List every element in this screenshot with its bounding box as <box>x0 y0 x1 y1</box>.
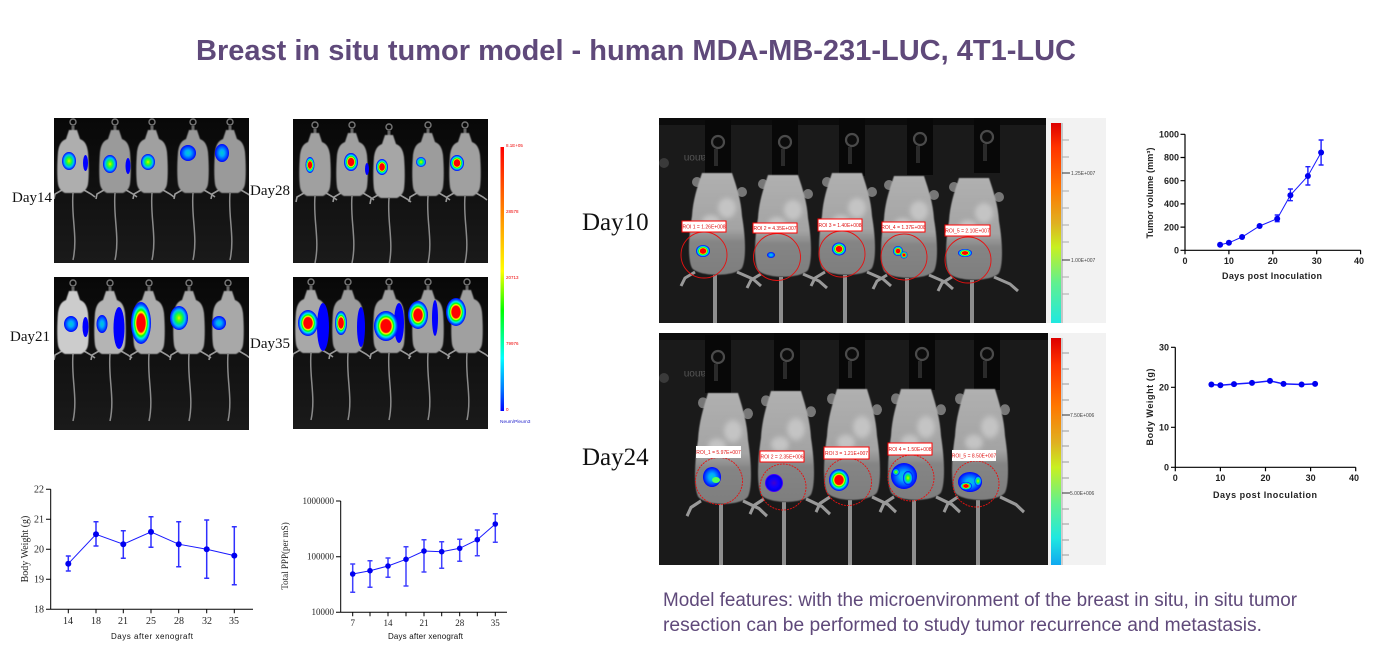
panel: Day24 image with ROI circles: Tanon <box>684 368 711 379</box>
color scale: Day10: 1.00E+007 <box>1071 258 1096 264</box>
panel: Day24 image with ROI circles: ROI_1 = 5.97E+007 <box>696 450 741 456</box>
chart: body weight, left: 21 <box>118 616 128 627</box>
chart: tumor volume: 10 <box>1224 256 1234 266</box>
text block: model features <box>663 590 1298 636</box>
chart: tumor volume: 800 <box>1164 153 1179 163</box>
chart: tumor volume: 0 <box>1174 246 1179 256</box>
panel: Day24 image with ROI circles: ROI 4 = 1.50E+008 <box>888 447 932 453</box>
chart: total photon flux, left: 7 <box>350 618 355 628</box>
chart: body weight, left: Body Weight (g) <box>20 516 31 582</box>
panel: Day10 image with ROI circles: ROI 3 = 1.40E+008 <box>818 223 862 229</box>
chart: body weight, left: 14 <box>63 616 73 627</box>
chart: body weight, right <box>1145 342 1359 500</box>
chart: tumor volume: Tumor volume (mm³) <box>1145 148 1155 238</box>
chart: tumor volume <box>1145 130 1364 281</box>
text block: model features: resection can be performed to study tumor recurrence and metastasis. <box>663 615 1262 636</box>
color scale bar for left images: 8.1E+05 <box>506 143 523 148</box>
chart: body weight, right: 40 <box>1349 473 1359 483</box>
chart: body weight, left: 25 <box>146 616 156 627</box>
title: Breast in situ tumor model - human MDA-MB-231-LUC, 4T1-LUC <box>196 35 1076 67</box>
color scale bar for left images: 0 <box>506 407 509 412</box>
panel: Day21 bioluminescence image <box>54 277 250 430</box>
chart: total photon flux, left: 21 <box>420 618 428 628</box>
label: Day14: Day14 <box>12 190 52 206</box>
panel: Day10 image with ROI circles: ROI_4 = 1.37E+008 <box>881 225 926 231</box>
chart: total photon flux, left: 28 <box>455 618 465 628</box>
chart: body weight, right: 10 <box>1215 473 1225 483</box>
chart: total photon flux, left: 10000 <box>312 607 334 617</box>
color scale: Day24: 5.00E+006 <box>1070 491 1095 497</box>
panel: Day24 image with ROI circles: ROI_5 = 8.50E+007 <box>952 454 996 460</box>
panel: Day10 image with ROI circles <box>659 118 1046 323</box>
chart: body weight, left: 18 <box>34 604 44 616</box>
chart: total photon flux, left: 100000 <box>307 552 334 562</box>
text block: model features: Model features: with the microenvironment of the breast in situ, in situ tumor <box>663 590 1298 611</box>
chart: body weight, left: 21 <box>34 514 44 526</box>
chart: body weight, left: 28 <box>174 616 184 627</box>
chart: body weight, left: 32 <box>202 616 212 627</box>
chart: tumor volume: 400 <box>1164 199 1179 209</box>
panel: Day35 bioluminescence image <box>292 277 489 429</box>
panel: Day10 image with ROI circles: ROI 1 = 1.26E+008 <box>682 224 726 230</box>
chart: total photon flux, left: 14 <box>384 618 393 628</box>
label: Day10: Day10 <box>582 209 649 236</box>
color scale bar for left images: 20713 <box>506 275 519 280</box>
chart: tumor volume: 20 <box>1268 256 1278 266</box>
chart: body weight, right: Days post Inoculation <box>1213 490 1317 500</box>
chart: body weight, left: 20 <box>34 544 44 556</box>
chart: body weight, right: 20 <box>1159 382 1169 392</box>
chart: body weight, left: 19 <box>34 574 44 586</box>
panel: Day24 image with ROI circles: ROI 2 = 2.35E+006 <box>760 454 804 460</box>
chart: tumor volume: 30 <box>1312 256 1322 266</box>
color scale: Day10 <box>1046 118 1106 323</box>
panel: Day14 bioluminescence image <box>54 118 252 263</box>
chart: total photon flux, left: 1000000 <box>302 496 334 506</box>
chart: tumor volume: 1000 <box>1159 130 1179 140</box>
panel: Day10 image with ROI circles: ROI_5 = 2.10E+007 <box>945 228 990 234</box>
chart: tumor volume: 0 <box>1182 256 1188 266</box>
chart: body weight, right: 10 <box>1159 422 1169 432</box>
chart: total photon flux, left: Total PPP(per mS) <box>280 522 290 590</box>
panel: Day28 bioluminescence image <box>293 119 488 265</box>
label: Day28: Day28 <box>250 183 290 199</box>
chart: body weight, left: 22 <box>34 484 44 496</box>
chart: body weight, left: Days after xenograft <box>111 632 194 641</box>
color scale bar for left images: 79976 <box>506 341 519 346</box>
panel: Day10 image with ROI circles: Tanon <box>684 152 711 163</box>
color scale: Day10: 1.25E+007 <box>1071 171 1096 177</box>
chart: total photon flux, left: Days after xenograft <box>388 632 464 641</box>
chart: tumor volume: 40 <box>1354 256 1364 266</box>
chart: body weight, right: 0 <box>1173 473 1178 483</box>
chart: tumor volume: 200 <box>1164 222 1179 232</box>
color scale: Day24 <box>1048 333 1106 565</box>
chart: body weight, right: 30 <box>1159 342 1169 352</box>
panel: Day24 image with ROI circles: ROI 3 = 1.21E+007 <box>825 451 868 457</box>
label: Day24: Day24 <box>582 444 649 471</box>
color scale bar for left images: Neum/Pleum3 <box>500 419 531 425</box>
chart: tumor volume: Days post Inoculation <box>1222 271 1322 281</box>
chart: body weight, right: 0 <box>1164 462 1169 472</box>
label: Day35: Day35 <box>250 336 290 352</box>
color scale bar for left images <box>500 143 531 425</box>
chart: body weight, left: 35 <box>229 616 239 627</box>
chart: total photon flux, left: 35 <box>491 618 500 628</box>
chart: tumor volume: 600 <box>1164 176 1179 186</box>
label: Day21: Day21 <box>10 329 50 345</box>
chart: body weight, right: 20 <box>1260 473 1271 483</box>
chart: body weight, right: 30 <box>1306 473 1316 483</box>
panel: Day10 image with ROI circles: ROI 2 = 4.35E+007 <box>753 226 797 232</box>
color scale bar for left images: 28578 <box>506 209 519 214</box>
chart: body weight, left: 18 <box>91 616 101 627</box>
chart: body weight, right: Body Weight (g) <box>1145 368 1155 446</box>
color scale: Day24: 7.50E+006 <box>1070 413 1095 419</box>
chart: body weight, left <box>20 484 253 641</box>
panel: Day24 image with ROI circles <box>659 333 1048 565</box>
chart: total photon flux, left <box>280 496 507 641</box>
